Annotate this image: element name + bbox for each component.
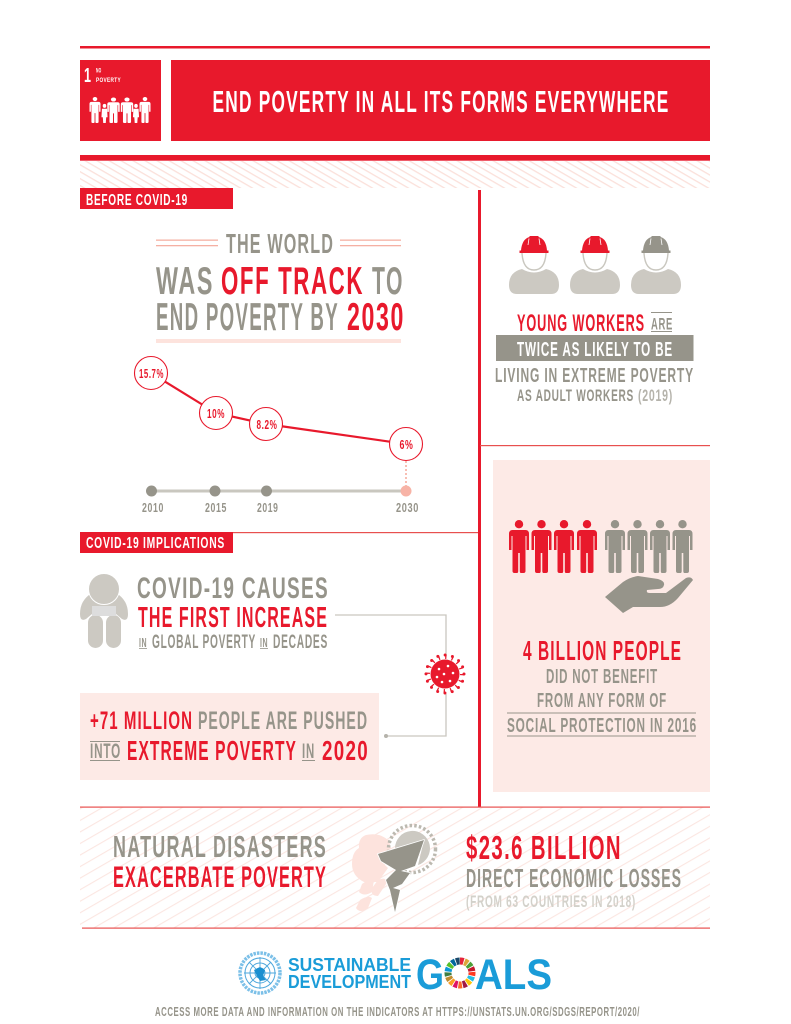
header top rule xyxy=(80,46,710,48)
panel: 71 million pushed into poverty: PEOPLE ARE PUSHED xyxy=(198,707,368,735)
panel: 71 million pushed into poverty: IN xyxy=(302,740,315,763)
text: covid-19 causes first increase xyxy=(137,572,329,653)
line chart: poverty rate 2010 to 2030: 2010 xyxy=(142,501,164,515)
icon: SDG 1 no poverty tile: NO xyxy=(96,68,102,74)
heading: the world was off track xyxy=(156,228,405,343)
panel: 71 million pushed into poverty: 2020 xyxy=(322,735,369,766)
panel: natural disasters xyxy=(80,806,710,929)
heading: the world was off track: WAS xyxy=(156,260,214,303)
text: 4 billion people: DID NOT BENEFIT xyxy=(546,665,658,688)
logo: sustainable development goals: G xyxy=(416,951,444,999)
text: young workers twice as likely: AS ADULT WORKERS xyxy=(517,387,634,405)
heading: the world was off track: OFF TRACK xyxy=(221,260,364,303)
text: young workers twice as likely: TWICE AS LIKELY TO BE xyxy=(517,339,673,361)
panel: social protection xyxy=(493,460,710,792)
heading: the world was off track: THE WORLD xyxy=(226,228,334,259)
text: covid-19 causes first increase: DECADES xyxy=(273,632,328,653)
text: young workers twice as likely: ARE xyxy=(651,314,673,334)
line chart: poverty rate 2010 to 2030: 8.2% xyxy=(256,417,278,432)
title banner xyxy=(171,60,710,141)
line chart: poverty rate 2010 to 2030: 2019 xyxy=(257,501,278,515)
text: covid-19 causes first increase: GLOBAL POVERTY xyxy=(152,632,256,653)
icon: tornado, cloud and sun xyxy=(352,826,436,912)
connector arrow xyxy=(335,615,446,738)
text: covid-19 causes first increase: THE FIRST INCREASE xyxy=(138,602,328,634)
text: natural disasters exacerbate poverty: EXACERBATE POVERTY xyxy=(113,861,327,894)
line chart: poverty rate 2010 to 2030: 15.7% xyxy=(139,366,164,381)
line chart: poverty rate 2010 to 2030: 6% xyxy=(400,437,414,452)
icon: SDG 1 no poverty tile xyxy=(80,60,161,141)
logo: sustainable development goals xyxy=(240,951,552,999)
icon: SDG 1 no poverty tile: 1 xyxy=(84,65,91,87)
text: 4 billion people xyxy=(507,635,697,737)
line chart: poverty rate 2010 to 2030 xyxy=(134,356,422,515)
heading: the world was off track: 2030 xyxy=(347,296,405,339)
right divider xyxy=(480,445,710,446)
header hatch strip xyxy=(80,161,710,188)
heading: the world was off track: END POVERTY BY xyxy=(156,296,339,339)
text: natural disasters exacerbate poverty: NATURAL DISASTERS xyxy=(113,829,327,864)
panel: 71 million pushed into poverty: +71 MILLION xyxy=(90,707,193,735)
label: before covid-19: BEFORE COVID-19 xyxy=(86,192,188,209)
text: 4 billion people: FROM ANY FORM OF xyxy=(537,689,667,712)
text: natural disasters exacerbate poverty xyxy=(113,829,327,894)
text: covid-19 causes first increase: IN xyxy=(260,635,268,650)
text: direct economic losses: (FROM 63 COUNTRIES IN 2018) xyxy=(466,893,636,911)
icon: SDG colour wheel xyxy=(448,961,472,985)
label: covid-19 implications: COVID-19 IMPLICATIONS xyxy=(86,535,225,552)
logo: sustainable development goals: DEVELOPMENT xyxy=(288,972,411,992)
text: direct economic losses xyxy=(466,829,682,911)
header red band xyxy=(80,155,710,161)
icon: seated person xyxy=(80,574,128,648)
text: covid-19 causes first increase: COVID-19 CAUSES xyxy=(137,572,329,605)
text: young workers twice as likely: YOUNG WORKERS xyxy=(517,310,645,337)
text: young workers twice as likely xyxy=(495,310,694,405)
label: covid-19 implications xyxy=(80,532,478,553)
panel: 71 million pushed into poverty xyxy=(80,693,379,780)
panel: 71 million pushed into poverty: EXTREME POVERTY xyxy=(127,735,297,766)
text: young workers twice as likely: (2019) xyxy=(638,387,673,405)
line chart: poverty rate 2010 to 2030: 2030 xyxy=(396,501,419,515)
line chart: poverty rate 2010 to 2030: 2015 xyxy=(205,501,227,515)
icon: young workers in helmets xyxy=(509,236,681,294)
text: direct economic losses: $23.6 BILLION xyxy=(466,829,622,866)
logo: sustainable development goals: ALS xyxy=(475,951,552,999)
vertical divider xyxy=(478,190,481,807)
icon: UN emblem xyxy=(240,953,280,993)
heading: the world was off track: TO xyxy=(372,260,404,303)
line chart: poverty rate 2010 to 2030: 10% xyxy=(207,406,225,421)
icon: SDG 1 no poverty tile: POVERTY xyxy=(96,77,121,84)
panel: 71 million pushed into poverty: INTO xyxy=(90,740,121,763)
icon: people and hand xyxy=(509,520,693,613)
text: covid-19 causes first increase: IN xyxy=(139,635,147,650)
logo: sustainable development goals: SUSTAINABLE xyxy=(288,955,411,975)
icon: coronavirus xyxy=(426,655,464,693)
